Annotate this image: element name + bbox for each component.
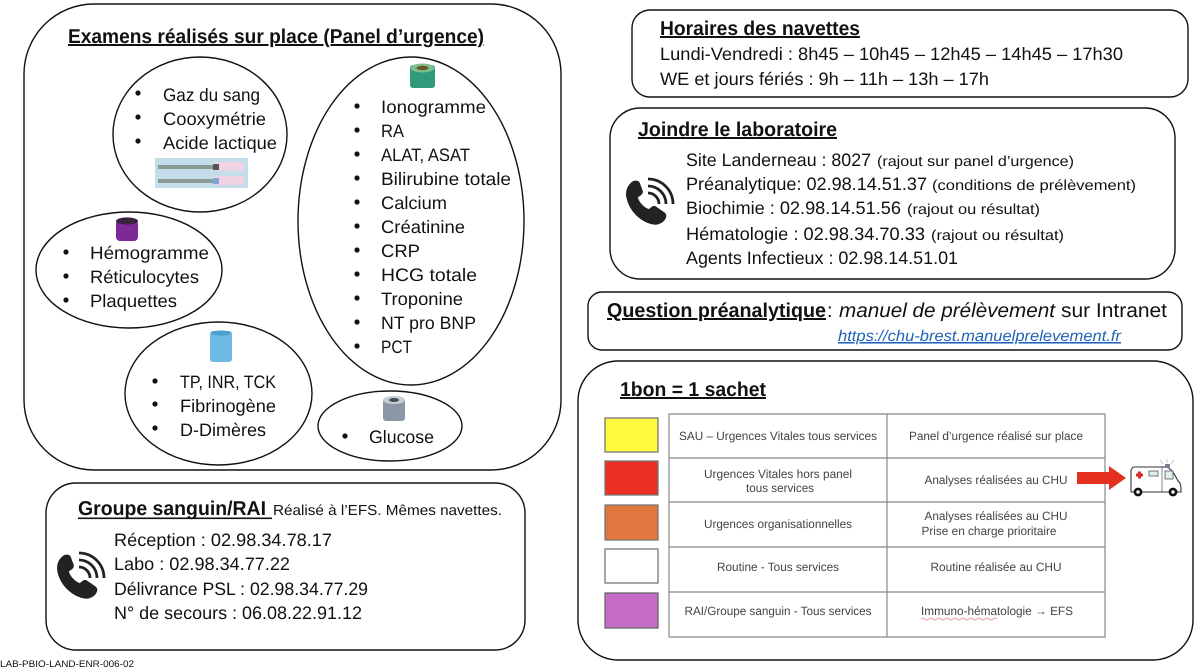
ellipse bbox=[298, 57, 524, 385]
icon: tube bleu bbox=[210, 330, 232, 362]
group: glucose bbox=[318, 391, 462, 461]
table: RAI/Groupe sanguin - Tous services bbox=[684, 604, 872, 618]
list: Créatinine bbox=[381, 217, 465, 237]
table: Analyses réalisées au CHU bbox=[924, 509, 1068, 523]
table: Immuno-hématologie → EFS bbox=[921, 604, 1073, 618]
bullet and label: Glucose bbox=[369, 427, 434, 447]
phone numbers: Réception : 02.98.34.78.17 bbox=[114, 530, 332, 550]
group: biochimie bbox=[298, 57, 524, 385]
link: https://chu-brest.manuelprelevement.fr bbox=[838, 328, 1122, 345]
ellipse bbox=[36, 212, 222, 328]
list: Bilirubine totale bbox=[381, 169, 511, 189]
list: Calcium bbox=[381, 193, 447, 213]
table: Analyses réalisées au CHU bbox=[924, 473, 1068, 487]
contacts: Hématologie : 02.98.34.70.33 bbox=[686, 224, 925, 244]
list bbox=[152, 372, 276, 440]
list: Réticulocytes bbox=[90, 267, 199, 287]
table: tous services bbox=[746, 481, 814, 495]
phone numbers: N° de secours : 06.08.22.91.12 bbox=[114, 603, 362, 623]
heading: groupe sanguin: Groupe sanguin/RAI bbox=[78, 498, 266, 520]
list: Plaquettes bbox=[90, 291, 177, 311]
list: Troponine bbox=[381, 289, 463, 309]
group: hémogramme bbox=[36, 212, 222, 328]
group: gaz du sang bbox=[113, 57, 287, 212]
list: Hémogramme bbox=[90, 243, 209, 263]
description: manuel de prélèvement bbox=[839, 300, 1056, 322]
ellipse bbox=[318, 391, 462, 461]
contacts: Agents Infectieux : 02.98.14.51.01 bbox=[686, 248, 958, 268]
panel: question préanalytique bbox=[588, 292, 1182, 350]
contacts: (rajout ou résultat) bbox=[931, 228, 1064, 244]
contacts: Biochimie : 02.98.14.51.56 bbox=[686, 198, 901, 218]
list: PCT bbox=[381, 337, 412, 357]
table: Panel d’urgence réalisé sur place bbox=[909, 429, 1083, 443]
list: Gaz du sang bbox=[163, 85, 260, 105]
note: Réalisé à l’EFS. Mêmes navettes. bbox=[273, 503, 502, 519]
contacts: (rajout ou résultat) bbox=[907, 202, 1040, 218]
icon: seringues bbox=[155, 158, 248, 188]
table: Urgences Vitales hors panel bbox=[704, 467, 852, 481]
heading: question: Question préanalytique bbox=[607, 300, 826, 322]
contacts: (conditions de prélèvement) bbox=[932, 178, 1136, 194]
table: SAU – Urgences Vitales tous services bbox=[679, 429, 877, 443]
panel frame bbox=[24, 4, 561, 470]
list: HCG totale bbox=[381, 265, 477, 285]
phone numbers bbox=[114, 530, 368, 623]
table bbox=[669, 414, 1105, 637]
panel: groupe sanguin bbox=[46, 483, 525, 650]
icon: tube gris bbox=[383, 396, 405, 421]
list: RA bbox=[381, 121, 404, 141]
list: ALAT, ASAT bbox=[381, 145, 470, 165]
weekend schedule: WE et jours fériés : 9h – 11h – 13h – 17h bbox=[660, 69, 989, 89]
ellipse bbox=[125, 322, 312, 465]
panel frame bbox=[632, 10, 1188, 97]
colour swatches bbox=[605, 418, 658, 628]
list bbox=[354, 97, 511, 357]
heading: joindre: Joindre le laboratoire bbox=[638, 119, 837, 141]
list: CRP bbox=[381, 241, 420, 261]
contacts: Site Landerneau : 8027 bbox=[686, 150, 871, 170]
group: coagulation bbox=[125, 322, 312, 465]
description: : bbox=[827, 300, 833, 322]
heading: sachet: 1bon = 1 sachet bbox=[620, 379, 766, 401]
icon: téléphone bbox=[627, 179, 673, 224]
icon: tube violet bbox=[116, 217, 138, 241]
footer reference: LAB-PBIO-LAND-ENR-006-02 bbox=[0, 659, 134, 670]
contacts: (rajout sur panel d’urgence) bbox=[877, 154, 1074, 170]
list: Acide lactique bbox=[163, 133, 277, 153]
table: Routine - Tous services bbox=[717, 560, 839, 574]
phone numbers: Labo : 02.98.34.77.22 bbox=[114, 554, 290, 574]
list: Ionogramme bbox=[381, 97, 486, 117]
contacts bbox=[686, 150, 1136, 268]
panel frame bbox=[46, 483, 525, 650]
icon: ambulance bbox=[1131, 459, 1181, 496]
list: Cooxymétrie bbox=[163, 109, 266, 129]
table: Prise en charge prioritaire bbox=[922, 524, 1057, 538]
contacts: Préanalytique: 02.98.14.51.37 bbox=[686, 174, 927, 194]
panel: joindre le laboratoire bbox=[610, 108, 1175, 279]
description bbox=[827, 300, 1167, 322]
heading: examens: Examens réalisés sur place (Panel d’urgence) bbox=[68, 26, 484, 48]
icon: tube vert bbox=[410, 64, 435, 88]
panel: 1 bon = 1 sachet bbox=[578, 361, 1193, 660]
table: Routine réalisée au CHU bbox=[930, 560, 1062, 574]
list: NT pro BNP bbox=[381, 313, 476, 333]
list bbox=[135, 85, 277, 153]
list: TP, INR, TCK bbox=[180, 372, 276, 392]
list bbox=[63, 243, 209, 311]
ellipse bbox=[113, 57, 287, 212]
panel: horaires des navettes bbox=[632, 10, 1188, 97]
panel frame bbox=[610, 108, 1175, 279]
icon: téléphone bbox=[58, 553, 104, 598]
table: Urgences organisationnelles bbox=[704, 517, 852, 531]
panel: examens réalisés sur place bbox=[24, 4, 561, 470]
list: Fibrinogène bbox=[180, 396, 276, 416]
panel frame bbox=[588, 292, 1182, 350]
list: D-Dimères bbox=[180, 420, 266, 440]
weekday schedule: Lundi-Vendredi : 8h45 – 10h45 – 12h45 – 14h45 – 17h30 bbox=[660, 44, 1123, 64]
heading: horaires: Horaires des navettes bbox=[660, 18, 860, 40]
phone numbers: Délivrance PSL : 02.98.34.77.29 bbox=[114, 579, 368, 599]
panel frame bbox=[578, 361, 1193, 660]
description: sur Intranet bbox=[1061, 300, 1167, 322]
arrow: vers ambulance bbox=[1077, 466, 1126, 490]
